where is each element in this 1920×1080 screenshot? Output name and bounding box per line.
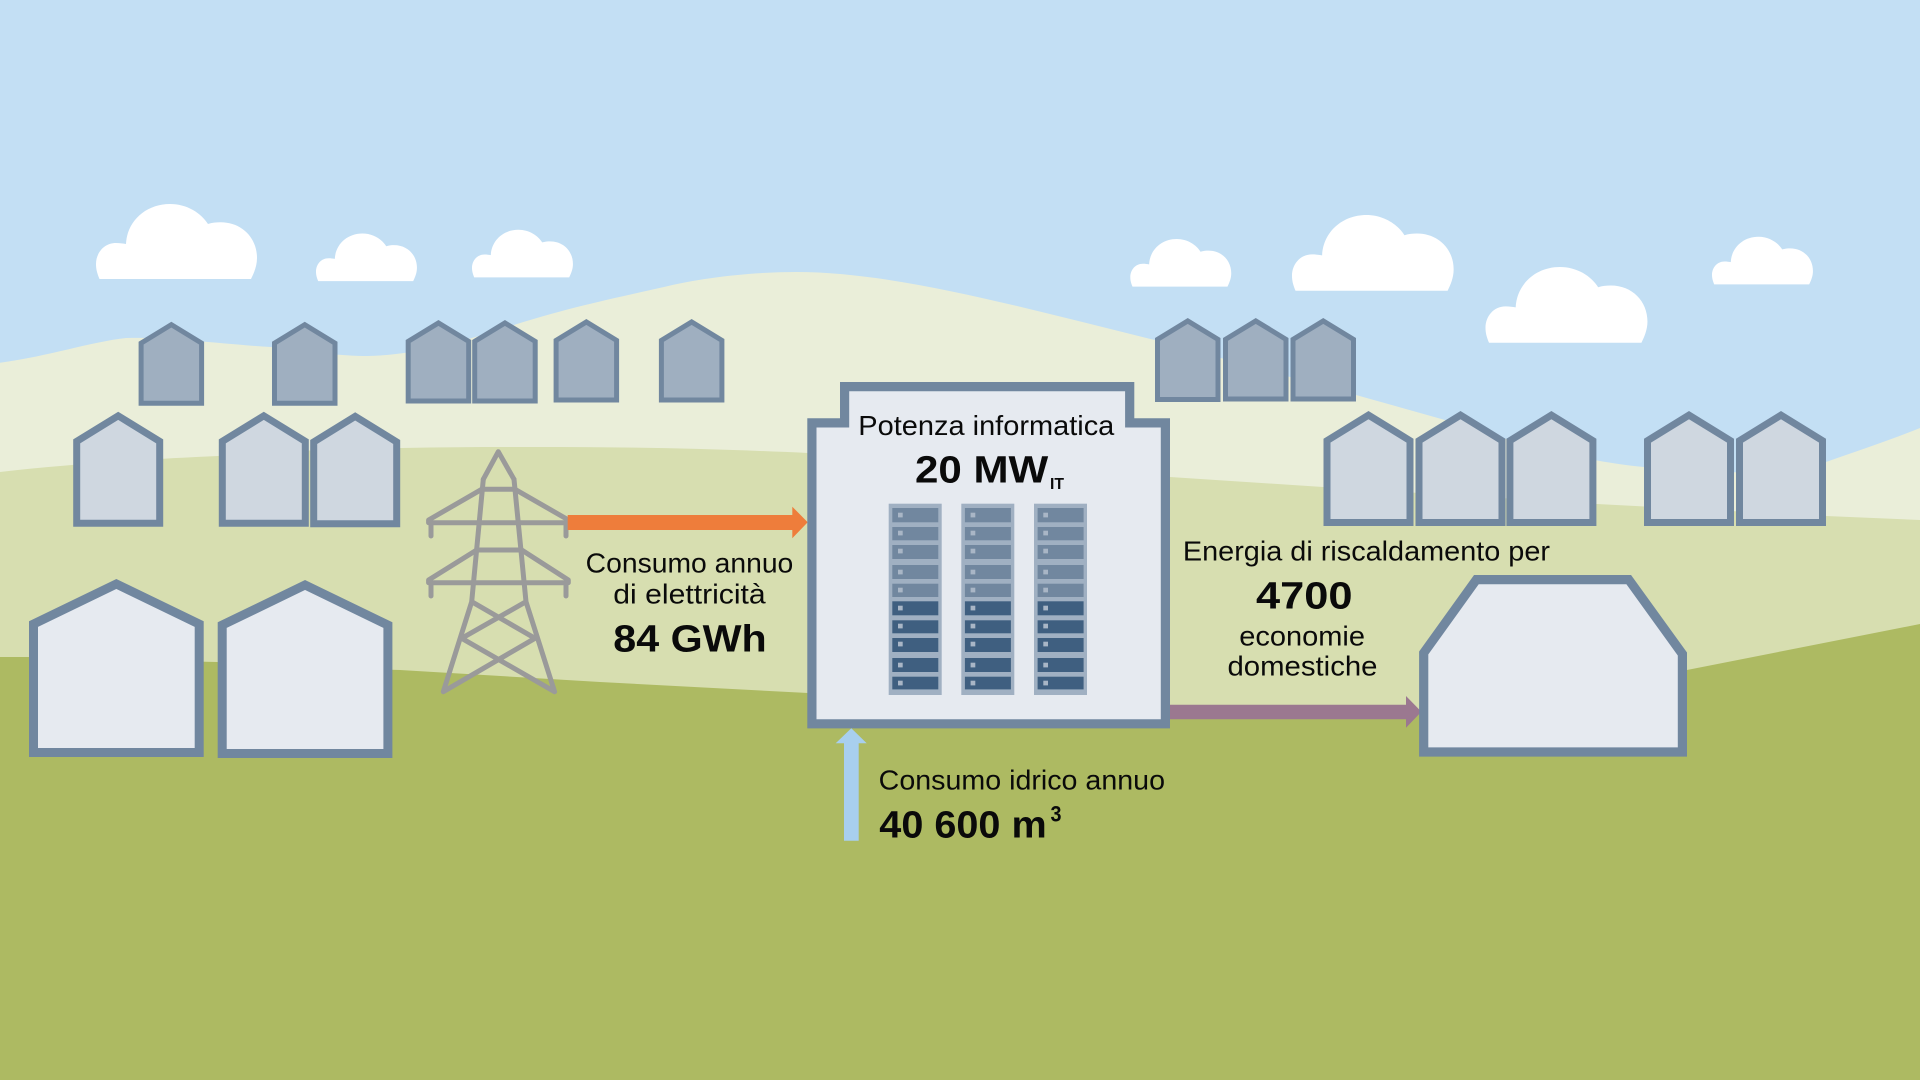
small house 9 bbox=[1293, 321, 1354, 399]
clouds bbox=[96, 204, 1813, 343]
middle hill bbox=[0, 447, 1920, 1080]
text block: heating energy: Energia di riscaldamento per bbox=[1183, 536, 1550, 567]
small house 3 bbox=[408, 323, 469, 401]
cloud 7 bbox=[1712, 237, 1813, 284]
text block: water consumption bbox=[879, 764, 1165, 847]
text block: electricity consumption bbox=[586, 548, 793, 661]
medium house 4 bbox=[1327, 415, 1410, 522]
icon: electricity pylon bbox=[429, 452, 568, 692]
small house 1 bbox=[141, 325, 202, 403]
heated district building bbox=[1424, 580, 1682, 752]
arrow: heat output bbox=[1168, 696, 1421, 728]
server rack 2 bbox=[961, 504, 1014, 695]
small house 7 bbox=[1158, 321, 1218, 400]
server rack 3 bbox=[1034, 504, 1087, 695]
text block: water consumption: 40 600 m bbox=[879, 805, 1047, 847]
value: 20 MW IT: IT bbox=[1050, 476, 1064, 493]
large houses foreground left bbox=[34, 584, 388, 754]
cloud 6 bbox=[1486, 267, 1647, 343]
value: 20 MW IT: 20 MW bbox=[915, 450, 1048, 492]
medium house 1 bbox=[77, 416, 160, 523]
panel: data centre building bbox=[812, 387, 1165, 724]
small house 5 bbox=[556, 322, 617, 400]
medium house 2 bbox=[222, 416, 305, 523]
distant houses row left and right bbox=[141, 321, 1354, 403]
text block: heating energy: 4700 bbox=[1256, 575, 1352, 617]
server rack 1 bbox=[889, 504, 942, 695]
text block: heating energy: domestiche bbox=[1228, 650, 1378, 681]
medium house 7 bbox=[1648, 415, 1730, 522]
cloud 3 bbox=[472, 230, 573, 277]
medium house 5 bbox=[1419, 415, 1502, 522]
small house 8 bbox=[1226, 321, 1286, 399]
text block: water consumption: Consumo idrico annuo bbox=[879, 764, 1165, 795]
medium houses row bbox=[77, 415, 1823, 524]
cloud 4 bbox=[1130, 239, 1231, 287]
text block: electricity consumption: di elettricità bbox=[613, 578, 766, 609]
cloud 5 bbox=[1292, 215, 1454, 291]
medium house 3 bbox=[314, 416, 397, 524]
text block: electricity consumption: 84 GWh bbox=[613, 619, 767, 661]
text block: heating energy bbox=[1183, 536, 1550, 681]
large house 2 bbox=[222, 585, 388, 754]
arrow: water input bbox=[836, 728, 867, 841]
medium house 8 bbox=[1740, 415, 1822, 522]
cloud 1 bbox=[96, 204, 257, 279]
far hill bbox=[0, 272, 1920, 1080]
text block: heating energy: economie bbox=[1239, 620, 1365, 651]
small house 2 bbox=[274, 325, 335, 403]
medium house 6 bbox=[1510, 415, 1593, 522]
small house 6 bbox=[661, 322, 722, 400]
label: potenza informatica: Potenza informatica bbox=[858, 410, 1115, 441]
text block: water consumption: 3 bbox=[1050, 802, 1062, 827]
large house 1 bbox=[34, 584, 199, 752]
text block: electricity consumption: Consumo annuo bbox=[586, 548, 793, 579]
building outline bbox=[812, 387, 1165, 724]
arrow: electricity input bbox=[568, 507, 808, 538]
front hill bbox=[0, 624, 1920, 1080]
cloud 2 bbox=[316, 234, 417, 281]
small house 4 bbox=[475, 323, 535, 401]
